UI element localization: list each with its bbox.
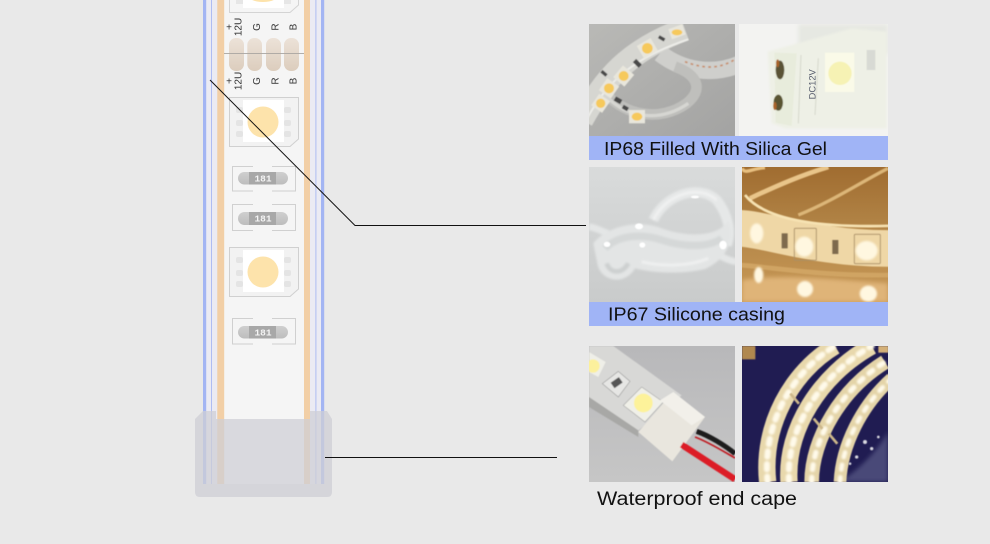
LED strip diagram bbox=[195, 0, 332, 497]
resistor 181 second bbox=[232, 204, 296, 230]
caption bar bbox=[589, 136, 888, 160]
LED module: 5050 chip upper bbox=[230, 98, 298, 146]
caption bar bbox=[589, 302, 888, 326]
pad labels upper row: + bbox=[226, 22, 232, 34]
pad labels lower row: B bbox=[288, 77, 300, 84]
pad labels upper row bbox=[226, 18, 300, 36]
end cap bbox=[195, 411, 332, 497]
resistor 181 second: 181 bbox=[254, 214, 272, 224]
strip casing and rails bbox=[203, 0, 324, 484]
panel: end cap bbox=[586, 346, 892, 510]
caption bar: IP68 Filled With Silica Gel bbox=[604, 138, 827, 159]
panel: IP68 bbox=[582, 24, 888, 160]
photo: end cap with red and black wires bbox=[589, 346, 735, 482]
printed label on strip: DC12V bbox=[808, 68, 818, 99]
solder pads with labels bbox=[224, 18, 304, 90]
photo: knotted gel-filled strip bbox=[589, 24, 735, 136]
pad labels lower row: R bbox=[270, 77, 282, 85]
resistor 181 first bbox=[232, 166, 296, 191]
pad labels upper row: G bbox=[252, 23, 263, 31]
resistor 181 third bbox=[232, 318, 296, 344]
pad labels upper row: R bbox=[270, 23, 282, 31]
LED module: top, cropped bbox=[230, 0, 298, 12]
photo: strip end cross-section bbox=[739, 24, 888, 136]
LED module: 5050 chip lower bbox=[230, 248, 298, 296]
caption: Waterproof end cape bbox=[597, 489, 797, 510]
pad labels lower row: 12U bbox=[234, 72, 244, 90]
panel: IP67 bbox=[589, 167, 895, 326]
caption bar: IP67 Silicone casing bbox=[608, 304, 785, 324]
pad labels lower row: G bbox=[252, 77, 263, 85]
resistor 181 first: 181 bbox=[254, 174, 272, 184]
resistor 181 third: 181 bbox=[254, 328, 272, 338]
leader line: casing to IP67 bbox=[210, 80, 586, 226]
photo: lit strips on water bbox=[742, 346, 888, 482]
leader line: end cap bbox=[325, 456, 557, 458]
pad labels lower row bbox=[226, 72, 300, 90]
photo: clear silicone tube bbox=[589, 167, 735, 302]
pad labels lower row: + bbox=[226, 76, 232, 88]
pad labels upper row: B bbox=[288, 23, 300, 30]
copper pads bbox=[229, 38, 299, 71]
pad labels upper row: 12U bbox=[234, 18, 244, 36]
photo: lit warm white strip bbox=[742, 167, 888, 302]
